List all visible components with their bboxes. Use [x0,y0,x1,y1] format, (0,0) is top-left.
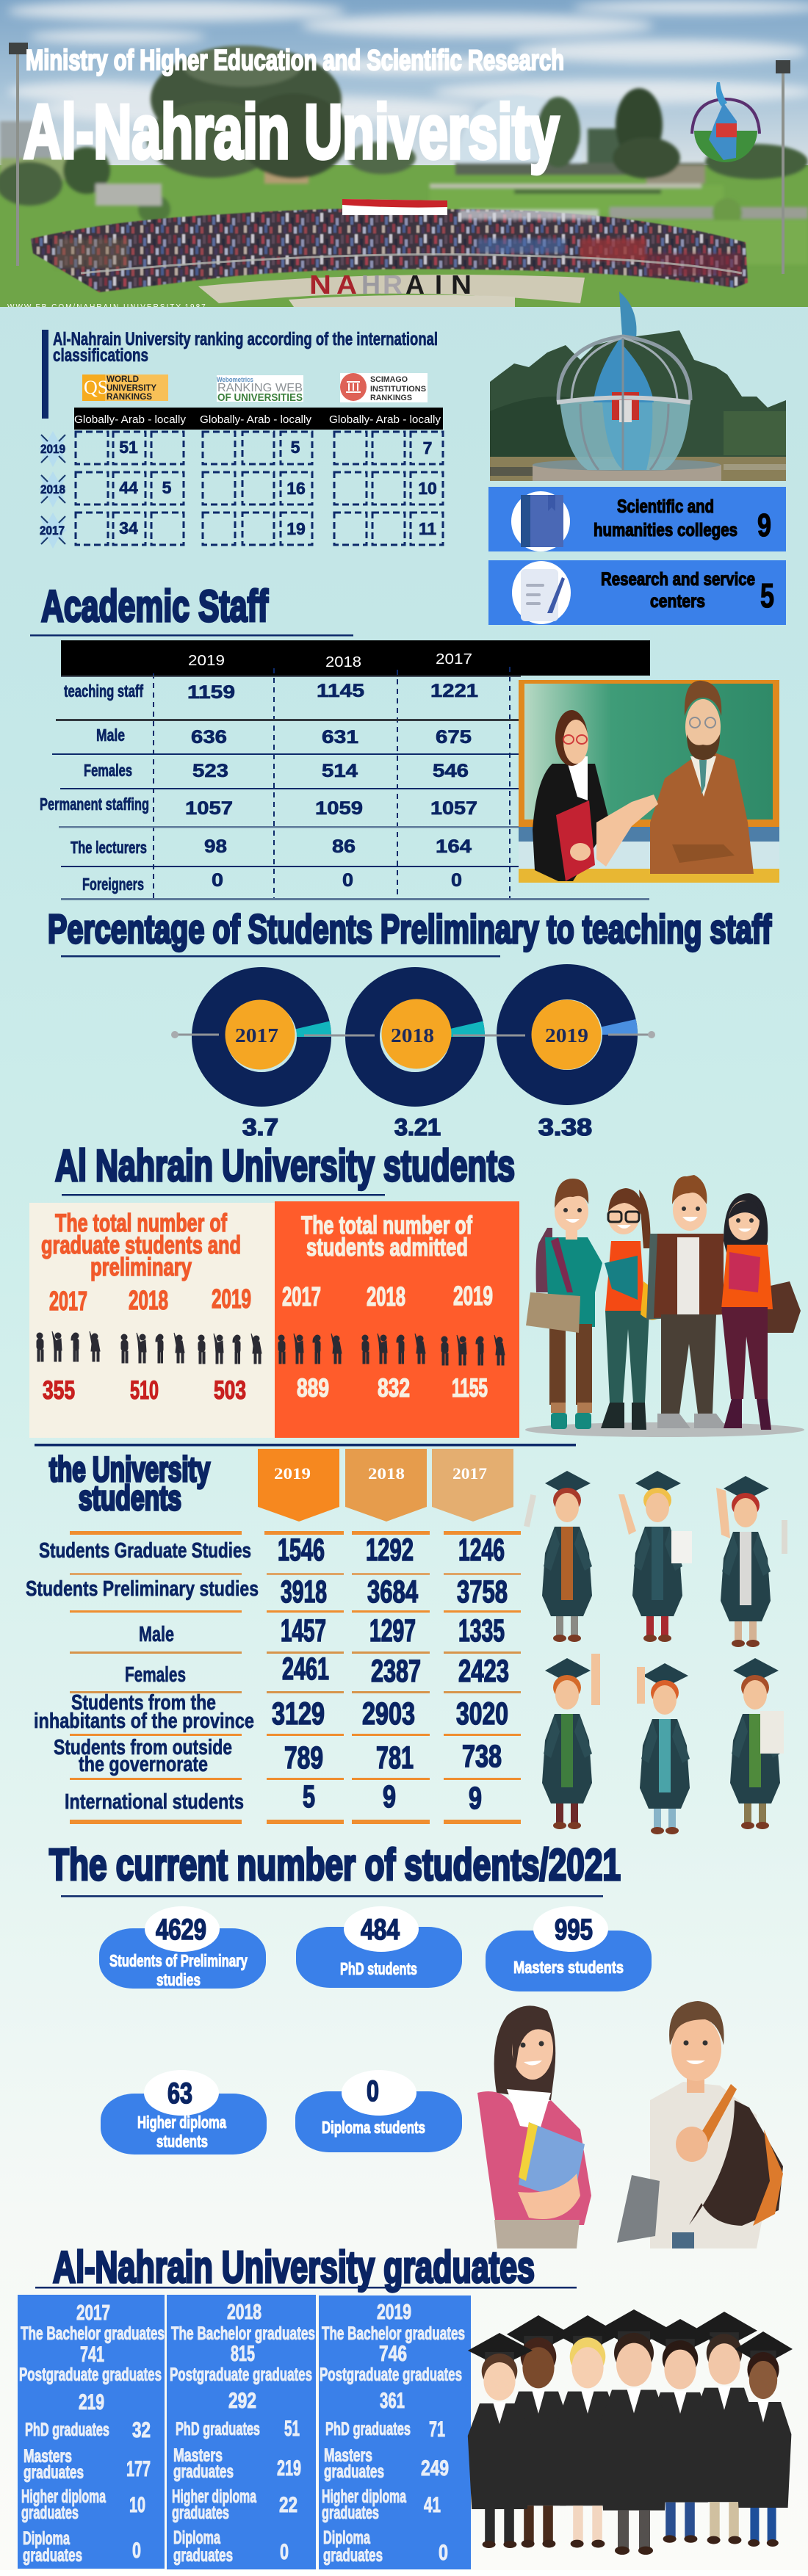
illustration: man with backpack [617,2001,783,2248]
panel: graduates 2017: 2017 [76,2301,110,2325]
table header: Globally- Arab - locally [74,413,186,426]
panel: students admitted: 832 [378,1374,410,1403]
staff numbers: 675 [436,727,472,748]
panel: graduates 2019: graduates [323,2545,383,2566]
pill: diploma students: Diploma students [322,2118,425,2137]
donut 2019 [497,964,638,1105]
pill: PhD students [296,1906,462,1988]
panel: graduates 2017: 32 [132,2418,151,2442]
staff numbers: 1057 [430,798,477,819]
panel: graduates 2019: Postgraduate graduates [320,2365,462,2385]
row labels: The lecturers [71,838,147,857]
panel: graduates 2018: 51 [284,2417,300,2441]
staff numbers: 1059 [315,798,363,819]
panel: graduate and preliminary totals: 2017 [49,1286,87,1316]
panel: graduates 2017: PhD graduates [25,2420,109,2440]
NAHRAIN letters sign: N [451,269,472,300]
panel: graduates 2017: graduates [21,2503,79,2523]
logo: scimago: RANKINGS [370,394,412,402]
card: research centers: centers [650,591,705,612]
card: research centers: 5 [760,576,774,615]
student numbers: 2461 [282,1651,329,1687]
panel: graduates 2018: PhD graduates [176,2419,260,2439]
hero photo of campus [0,0,808,311]
pill: diploma students [295,2070,462,2152]
student 2 [601,1188,664,1430]
NAHRAIN letters sign [311,275,470,294]
staff numbers: 1159 [187,682,235,703]
icon: note and pen [512,561,571,624]
row labels: Students Preliminary studies [26,1577,259,1601]
row labels: Students from outside [54,1736,232,1759]
dashed ranking boxes [76,432,443,545]
row labels: Students Graduate Studies [39,1539,251,1563]
panel: graduates 2017: graduates [24,2462,84,2483]
panel: graduates 2018: 2018 [227,2301,261,2324]
NAHRAIN letters sign: A [405,269,425,300]
logo: QS [82,375,168,402]
pill: diploma students: 0 [367,2075,379,2108]
heading: graduates: Al-Nahrain University graduates [53,2243,535,2292]
panel: graduates 2019: Diploma [323,2528,371,2548]
student numbers: 3918 [281,1574,327,1610]
year badges: 2018 [40,482,65,496]
teacher: man [650,681,754,874]
table header: 2018 [325,654,361,670]
illustration: six graduates [524,1471,787,1834]
donut values [242,1114,592,1140]
panel: graduates 2018 [167,2295,316,2569]
staff numbers: 546 [433,761,469,781]
student numbers: 1292 [366,1533,414,1568]
row labels: Male [139,1623,174,1646]
year badges: 2019 [40,442,65,456]
row labels: Students from the [71,1691,216,1715]
year badges: 2017 [40,524,65,538]
panel: graduate and preliminary totals: 355 [43,1376,75,1405]
heading: the university students: students [79,1478,181,1517]
heading: current number of students: The current number of students/2021 [49,1840,621,1889]
heading: academic staff: Academic Staff [41,582,269,631]
panel: graduate and preliminary totals [29,1203,275,1438]
student numbers: 1335 [458,1613,505,1649]
heading: university students: Al Nahrain University students [55,1141,515,1190]
panel: graduates 2017: Masters [24,2446,72,2467]
staff numbers: 164 [436,836,472,857]
panel: graduate and preliminary totals: 503 [214,1376,246,1405]
donut year labels [235,1024,588,1046]
panel: graduates 2018: 0 [280,2540,289,2564]
student numbers: 3684 [367,1574,418,1610]
year ribbons: 2019 [274,1464,311,1483]
panel: graduates 2017: 219 [79,2390,104,2414]
ranking numbers: 5 [291,438,300,457]
pill: masters students: Masters students [513,1958,624,1977]
panel: graduates 2018: 219 [277,2456,301,2481]
heading: the university students [49,1450,210,1517]
panel: graduates 2019: The Bachelor graduates [322,2323,465,2344]
table header: 2019 [188,653,225,669]
row labels: Permanent staffing [40,795,149,814]
row labels: inhabitants of the province [34,1710,254,1733]
panel: graduates 2018: Higher diploma [172,2486,257,2507]
table header: Globally- Arab - locally [200,413,311,426]
panel: graduate and preliminary totals: 510 [130,1376,159,1405]
panel: graduates 2017: 0 [132,2539,141,2563]
panel: graduates 2019: graduates [322,2503,379,2523]
panel: students admitted: 2017 [282,1281,321,1311]
table header [74,408,443,430]
pill: higher diploma students: 63 [167,2077,192,2110]
card: colleges: Scientific and [617,496,714,517]
panel: graduates 2018: Postgraduate graduates [170,2365,312,2385]
ranking numbers [119,438,437,538]
card: research centers: Research and service [601,569,755,590]
student 1 [526,1179,602,1429]
panel: graduates 2017: graduates [23,2545,82,2566]
student numbers: 3020 [456,1696,508,1732]
donut values: 3.38 [538,1114,592,1140]
staff numbers: 0 [451,870,462,891]
student numbers: 738 [462,1739,502,1774]
heading: the university students: the University [49,1450,210,1488]
panel: graduates 2017: 177 [126,2457,151,2481]
row labels: International students [65,1790,244,1814]
staff numbers: 1221 [430,681,478,701]
logo: webometrics: Webometrics [217,376,253,383]
panel: graduates 2019: 71 [429,2417,445,2442]
crowd of students [31,209,748,292]
panel: students admitted: students admitted [306,1234,468,1262]
year ribbons [258,1449,513,1522]
row labels: Females [125,1663,186,1687]
year ribbons: 2017 [452,1464,487,1483]
panel: students admitted: 2018 [367,1281,405,1311]
panel: graduates 2018: graduates [173,2461,234,2482]
flag banner [342,199,447,215]
heading: rankings [53,329,438,366]
illustration: four students [525,1175,804,1437]
ranking numbers: 11 [419,519,436,538]
panel: graduates 2018: 292 [228,2389,256,2413]
table: university students [26,1531,521,1824]
panel: graduate and preliminary totals: graduate students and [41,1231,241,1259]
heading: rankings: Al-Nahrain University ranking according of the international [53,329,438,350]
panel: graduates 2017: 10 [129,2493,145,2517]
panel: students admitted [275,1201,519,1438]
logo: QS: RANKINGS [107,393,152,402]
ranking numbers: 51 [119,438,138,457]
row labels: Females [84,761,132,780]
donut year labels: 2018 [391,1024,434,1046]
logo: scimago: SCIMAGO [370,375,408,384]
panel: graduates 2019: 249 [421,2456,449,2481]
panel: graduates 2019: Higher diploma [322,2486,407,2507]
illustration: woman with books [477,2005,591,2248]
NAHRAIN letters sign: I [435,269,442,300]
illustration: seven graduates in black gowns [468,2309,793,2555]
NAHRAIN letters sign: N [309,269,331,300]
year ribbons: 2018 [368,1464,405,1483]
student numbers: 1546 [278,1533,325,1568]
table header [61,640,650,676]
ranking numbers: 16 [286,479,306,498]
card: colleges [488,487,786,551]
ranking numbers: 7 [423,438,432,457]
pill: higher diploma students: Higher diploma [137,2113,226,2132]
panel: graduates 2017: The Bachelor graduates [21,2323,165,2344]
photo: university sculpture [490,330,786,481]
panel: graduates 2019: 41 [424,2493,441,2517]
row labels: the governorate [79,1753,208,1776]
staff numbers: 86 [332,836,356,857]
title: ministry: Ministry of Higher Education and Scientific Research [26,45,564,76]
donut values: 3.7 [242,1114,278,1140]
logo: webometrics: OF UNIVERSITIES [217,391,303,404]
staff numbers [185,681,478,891]
divider [35,1444,576,1447]
pill: preliminary students: studies [156,1970,201,1989]
panel: graduates 2017: Diploma [23,2528,71,2549]
table header: 2017 [436,651,472,667]
student numbers: 1297 [369,1613,416,1649]
student numbers: 1246 [458,1533,505,1568]
staff numbers: 523 [192,761,228,781]
pill: PhD students: 484 [361,1914,400,1946]
student numbers: 3758 [457,1574,508,1610]
panel: graduates 2018: graduates [173,2545,233,2566]
panel: graduates 2017 [18,2295,165,2569]
logo: scimago: INSTITUTIONS [370,385,426,394]
donut values: 3.21 [394,1114,441,1140]
pill: higher diploma students [101,2070,267,2154]
sculpture tip from hero to photo [619,292,637,345]
light poles [9,43,790,274]
ranking numbers: 44 [119,478,138,497]
staff numbers: 0 [212,870,223,891]
panel: graduates 2017: 741 [80,2342,104,2367]
student numbers: 5 [303,1779,315,1815]
panel: students admitted: 2019 [453,1281,493,1311]
row labels [26,1539,259,1814]
pill: preliminary students: 4629 [156,1914,206,1946]
pill: preliminary students [99,1906,266,1989]
panel: graduate and preliminary totals: The total number of [55,1209,227,1237]
donut year labels: 2017 [235,1024,278,1046]
student numbers: 789 [284,1740,323,1776]
staff numbers: 0 [342,870,353,891]
student numbers: 2387 [371,1654,421,1689]
panel: graduates 2018: 815 [231,2342,255,2366]
row labels [40,681,149,894]
staff numbers: 631 [322,727,358,748]
student 3 [646,1175,727,1428]
logo: webometrics [217,375,303,404]
panel: graduates 2019: 361 [380,2389,405,2413]
ranking numbers: 10 [418,479,437,498]
panel: graduate and preliminary totals: 2019 [212,1284,251,1314]
NAHRAIN letters sign: R [383,269,403,300]
pill: higher diploma students: students [156,2132,208,2151]
panel: graduates 2018: 22 [279,2493,297,2517]
row labels: Male [96,726,125,745]
panel: graduates 2017: Postgraduate graduates [19,2365,162,2385]
panel: graduates 2018: graduates [172,2503,229,2523]
student 4 [721,1193,801,1430]
staff numbers: 514 [322,761,358,781]
panel: graduates 2018: Masters [173,2445,223,2466]
logo: scimago [340,373,428,402]
panel: students admitted: 889 [297,1374,329,1403]
ranking numbers: 5 [162,478,172,497]
NAHRAIN letters sign: H [361,269,380,300]
panel: graduates 2019: graduates [324,2461,384,2482]
card: research centers [488,560,786,625]
logo: webometrics: RANKING WEB [217,382,303,394]
donut 2018 [345,967,485,1107]
watermark: WWW.FB.COM/NAHRAIN.UNIVERSITY.1987 [7,303,207,311]
panel: graduates 2017: Higher diploma [21,2486,107,2507]
pill: masters students [486,1906,652,1991]
student numbers: 2903 [362,1696,415,1732]
panel: graduates 2019 [319,2295,471,2569]
heading: rankings: classifications [53,345,148,366]
pill: preliminary students: Students of Preliminary [109,1951,248,1970]
logo: QS: WORLD [107,375,139,384]
accent bar [42,330,48,419]
panel: graduate and preliminary totals: preliminary [90,1253,192,1281]
title: university: Al-Nahrain University [24,90,559,175]
student numbers: 781 [376,1740,414,1776]
logo: QS: UNIVERSITY [107,384,156,393]
year badges [39,431,67,549]
table header: Globally- Arab - locally [329,413,441,426]
student numbers: 2423 [458,1654,509,1689]
row labels: Foreigners [82,875,144,894]
icon: university logo [692,82,760,162]
student numbers: 9 [383,1779,396,1815]
illustration: teachers at chalkboard [519,680,779,883]
donut 2017 [192,967,331,1107]
panel: graduates 2019: PhD graduates [325,2419,411,2439]
panel: graduates 2018: Diploma [173,2528,221,2548]
ranking numbers: 19 [286,519,306,538]
student numbers [272,1533,509,1816]
walkway [198,275,585,303]
staff numbers: 1057 [185,798,233,819]
panel: graduates 2018: The Bachelor graduates [171,2323,315,2344]
icon: book [511,491,570,551]
teacher: woman [533,710,658,881]
card: colleges: 9 [757,507,771,543]
panel: graduates 2019: Masters [324,2445,372,2466]
panel: graduate and preliminary totals: 2018 [129,1285,168,1315]
student numbers: 1457 [281,1613,326,1649]
NAHRAIN letters sign: A [336,269,357,300]
panel: graduates 2019: 2019 [377,2301,411,2324]
pill: masters students: 995 [555,1914,593,1946]
panel: graduates 2019: 746 [379,2342,407,2366]
student numbers: 9 [469,1781,482,1816]
row labels: teaching staff [64,681,143,701]
donut year labels: 2019 [545,1024,588,1046]
logo: QS: QS [84,377,108,398]
ranking numbers: 34 [119,518,138,538]
panel: graduates 2019: 0 [439,2541,448,2565]
panel: students admitted: 1155 [452,1374,488,1403]
staff numbers: 636 [191,727,227,748]
staff numbers: 1145 [317,681,364,701]
staff numbers: 98 [204,836,227,857]
card: colleges: humanities colleges [594,520,737,540]
pill: PhD students: PhD students [340,1959,417,1978]
panel: international rankings [39,329,443,549]
student numbers: 3129 [272,1696,325,1732]
panel: students admitted: The total number of [301,1212,472,1240]
table: academic staff [40,640,650,900]
chart: donut charts [171,964,655,1140]
